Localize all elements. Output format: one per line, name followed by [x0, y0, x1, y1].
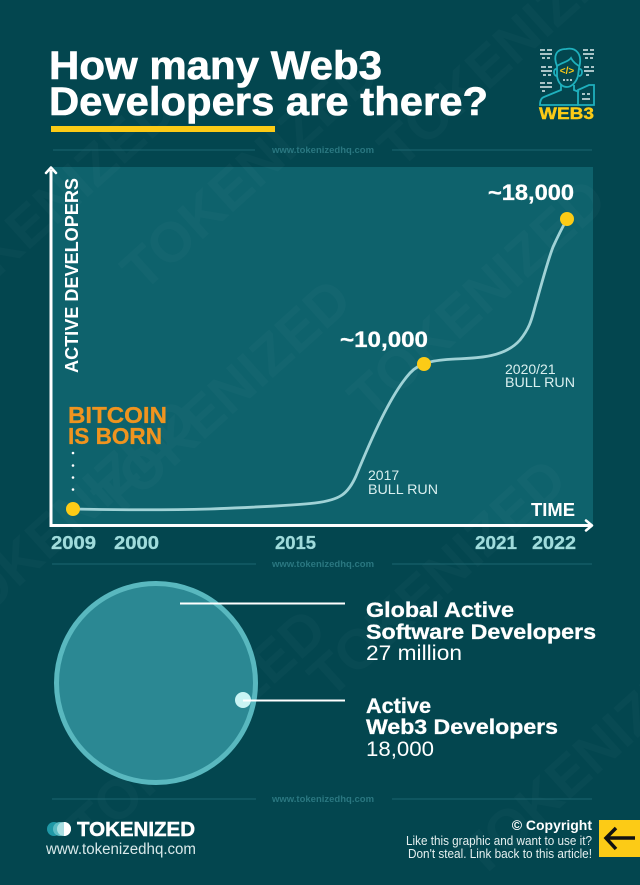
copyright notice: Like this graphic and want to use it?: [406, 833, 592, 848]
label: global developers: Software Developers: [366, 621, 596, 644]
label: global developers: Global Active: [366, 599, 514, 622]
label: web3 developers: Active: [366, 695, 431, 718]
icon code glyph: </>: [560, 66, 574, 77]
chart curve: [73, 219, 567, 510]
bull run labels: [368, 361, 575, 497]
divider with url: www.tokenizedhq.com: [271, 559, 374, 570]
label: web3 developers: Web3 Developers: [366, 716, 558, 739]
year labels: 2000: [114, 533, 159, 553]
bull run labels: BULL RUN: [505, 374, 575, 390]
divider with url: www.tokenizedhq.com: [271, 794, 374, 805]
icon label: WEB3: [539, 104, 594, 123]
year labels: 2022: [532, 533, 576, 553]
annotation: bitcoin is born: IS BORN: [68, 423, 162, 449]
leader lines: [180, 604, 345, 700]
label: global developers: [366, 599, 596, 665]
copyright notice: [406, 817, 592, 861]
year labels: 2015: [275, 533, 316, 553]
title: Developers are there?: [49, 80, 488, 124]
bull run labels: BULL RUN: [368, 481, 438, 497]
value labels: ~18,000: [488, 180, 574, 205]
copyright notice: © Copyright: [512, 817, 592, 833]
year labels: 2021: [475, 533, 517, 553]
icon: web3 developer: [539, 49, 594, 123]
label: global developers: 27 million: [366, 642, 462, 665]
title: [49, 44, 488, 124]
title: How many Web3: [49, 44, 382, 88]
circle: web3 developers: [235, 692, 251, 708]
y axis label: ACTIVE DEVELOPERS: [62, 178, 82, 373]
value labels: [340, 180, 574, 352]
dotted connector: [72, 452, 74, 491]
year labels: [51, 533, 576, 553]
icon: yellow arrow box: [599, 820, 640, 857]
line chart: [46, 168, 592, 553]
x axis label: TIME: [531, 500, 575, 520]
year labels: 2009: [51, 533, 96, 553]
footer logo: www.tokenizedhq.com: [45, 841, 196, 858]
copyright notice: Don't steal. Link back to this article!: [408, 846, 592, 861]
annotation: bitcoin is born: [68, 402, 167, 449]
data points: [66, 212, 574, 516]
label: web3 developers: 18,000: [366, 738, 434, 761]
circle: global developers: [56, 584, 256, 782]
footer logo: [45, 819, 196, 858]
axes: [51, 170, 591, 526]
label: web3 developers: [366, 695, 558, 761]
footer logo: TOKENIZED: [77, 819, 195, 841]
bull run labels: 2017: [368, 467, 399, 483]
annotation: bitcoin is born: BITCOIN: [68, 402, 167, 428]
panel: chart background: [52, 167, 593, 525]
title underline: [51, 126, 275, 132]
circle comparison: [56, 584, 596, 782]
value labels: ~10,000: [340, 327, 428, 352]
divider with url: www.tokenizedhq.com: [271, 145, 374, 156]
bull run labels: 2020/21: [505, 361, 556, 377]
